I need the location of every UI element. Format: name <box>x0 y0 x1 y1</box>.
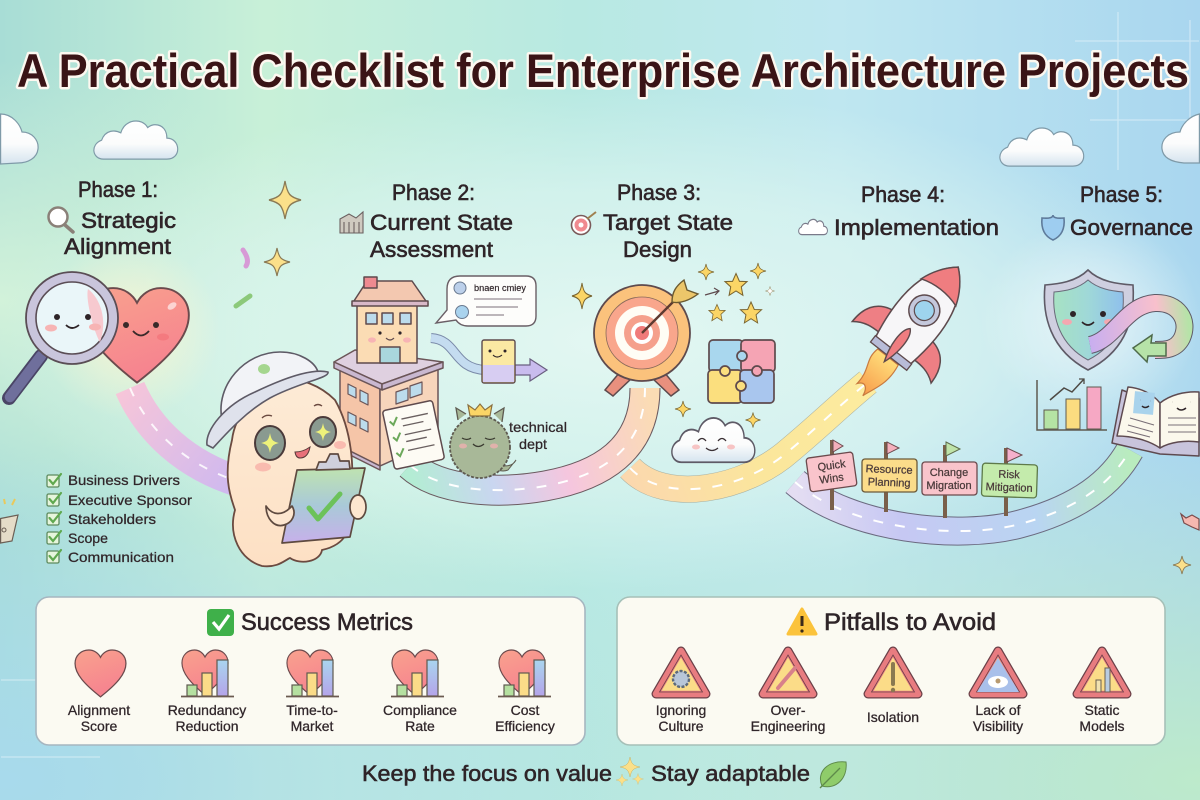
label: technical dept: dept <box>519 436 547 452</box>
clouds top <box>1 114 1199 166</box>
metric: redundancy reduction: Redundancy <box>168 702 246 718</box>
mascot hard hat <box>207 352 328 448</box>
icon: green check <box>207 609 234 636</box>
checklist paper <box>382 400 445 470</box>
phase 2 heading <box>340 180 513 262</box>
pitfall: over-engineering: Over- <box>770 702 806 718</box>
footer tagline <box>362 757 846 788</box>
label: technical dept <box>509 419 567 452</box>
illustration: lower building <box>334 350 443 470</box>
phase 4 heading: Implementation <box>834 215 999 240</box>
metric: redundancy reduction: Reduction <box>175 718 239 734</box>
speech bubble: bnaen cmiey <box>474 283 527 293</box>
phase 1 heading: Alignment <box>64 234 171 259</box>
phase 3 heading: Phase 3: <box>617 180 701 205</box>
metric: time-to-market <box>286 650 339 734</box>
stars around target <box>572 263 774 428</box>
flow arrow and card <box>431 338 547 383</box>
illustration: puzzle <box>708 340 775 403</box>
illustration: open book <box>1112 387 1199 456</box>
illustration: upper building <box>352 277 428 363</box>
phase 3 heading: Target State <box>603 210 733 235</box>
signpost: quick wins: Wins <box>819 471 845 487</box>
panel: success metrics <box>36 597 585 745</box>
metric: time-to-market: Time-to- <box>286 702 338 718</box>
sparkles and confetti near mascot <box>236 181 301 306</box>
pitfall: isolation: Isolation <box>867 709 919 725</box>
pitfall: static models <box>1077 651 1127 734</box>
checklist: strategic alignment <box>47 472 192 565</box>
chart: small bar chart <box>1037 379 1107 430</box>
metric: redundancy reduction <box>168 650 246 734</box>
illustration: shield <box>1044 270 1133 370</box>
speech bubble <box>436 276 536 326</box>
signpost: change migration: Migration <box>926 480 972 492</box>
metric: cost efficiency: Efficiency <box>495 718 555 734</box>
icon: magnifying glass <box>9 272 118 398</box>
panel: pitfalls to avoid <box>617 597 1165 745</box>
laptop fragment <box>1 499 18 543</box>
metric: alignment score <box>68 650 130 734</box>
icon: sparkles <box>616 757 644 786</box>
pitfall: lack of visibility <box>973 651 1023 734</box>
phase 4 heading: Phase 4: <box>861 182 945 207</box>
phase 3 heading <box>572 180 733 262</box>
icon: leaf <box>820 762 846 788</box>
pitfall: over-engineering <box>751 651 825 734</box>
illustration: smiling cloud <box>672 418 755 462</box>
panel: pitfalls to avoid: Pitfalls to Avoid <box>824 609 996 636</box>
pitfall: lack of visibility: Visibility <box>973 718 1023 734</box>
metric: alignment score: Score <box>81 718 117 734</box>
hand fragment and sparkle <box>1173 514 1199 574</box>
panel: success metrics: Success Metrics <box>241 609 413 636</box>
phase 5 heading: Governance <box>1070 215 1193 240</box>
metric: compliance rate: Rate <box>405 718 435 734</box>
icon: small shield <box>1042 215 1064 240</box>
pitfall: ignoring culture <box>656 651 706 734</box>
icon: smiling heart <box>85 288 189 383</box>
phase 2 heading: Current State <box>370 210 513 235</box>
metric: alignment score: Alignment <box>68 702 130 718</box>
mascot eyes <box>255 404 346 472</box>
signpost: resource planning <box>862 442 917 512</box>
footer tagline: Stay adaptable <box>651 761 810 786</box>
icon: small target <box>572 212 596 234</box>
signpost: risk mitigation: Mitigation <box>985 481 1033 495</box>
illustration: rocket <box>820 236 998 424</box>
signpost: change migration <box>922 442 977 518</box>
checklist: strategic alignment: Scope <box>68 530 108 546</box>
pitfall: lack of visibility: Lack of <box>975 702 1021 718</box>
mascot body <box>228 380 352 566</box>
metric: time-to-market: Market <box>291 718 333 734</box>
signpost: risk mitigation <box>981 448 1038 516</box>
mascot clipboard <box>266 454 366 543</box>
icon: warning <box>788 609 816 634</box>
signpost: change migration: Change <box>930 467 968 479</box>
icon: bank building <box>340 212 363 233</box>
monster: technical debt <box>450 404 516 478</box>
illustration: continuous improvement loop <box>1090 303 1184 362</box>
pitfall: ignoring culture: Culture <box>658 718 704 734</box>
metric: cost efficiency: Cost <box>511 702 539 718</box>
phase 2 heading: Phase 2: <box>392 180 475 205</box>
pitfall: static models: Static <box>1084 702 1120 718</box>
pitfall: static models: Models <box>1079 718 1125 734</box>
phase 5 heading <box>1042 182 1193 240</box>
footer tagline: Keep the focus on value <box>362 761 612 786</box>
pitfall: isolation <box>867 651 919 725</box>
phase 1 heading: Phase 1: <box>78 177 158 202</box>
label: technical dept: technical <box>509 419 567 435</box>
phase 2 heading: Assessment <box>370 237 493 262</box>
checklist: strategic alignment: Stakeholders <box>68 511 156 527</box>
illustration: target with arrow <box>594 280 719 396</box>
phase 3 heading: Design <box>623 237 692 262</box>
phase 1 heading <box>48 177 176 259</box>
pitfall: over-engineering: Engineering <box>751 718 825 734</box>
road: implementation to governance <box>795 450 1130 531</box>
signpost: quick wins: Quick <box>817 458 847 474</box>
signpost: resource planning: Resource <box>865 463 913 477</box>
road: target to rocket <box>630 382 868 489</box>
icon: small cloud <box>799 219 827 235</box>
checklist: strategic alignment: Executive Sponsor <box>68 492 192 508</box>
pitfall: ignoring culture: Ignoring <box>656 702 706 718</box>
signpost: risk mitigation: Risk <box>998 469 1020 481</box>
metric: compliance rate <box>383 650 457 734</box>
road: phase 1 to mascot <box>130 388 240 482</box>
checklist: strategic alignment: Communication <box>68 549 174 565</box>
signpost: quick wins <box>806 440 857 510</box>
checklist: strategic alignment: Business Drivers <box>68 472 180 488</box>
metric: compliance rate: Compliance <box>383 702 457 718</box>
phase 4 heading <box>799 182 999 240</box>
phase 1 heading: Strategic <box>81 208 176 233</box>
metric: cost efficiency <box>495 650 555 734</box>
road: phase 2 to target <box>410 388 645 490</box>
phase 5 heading: Phase 5: <box>1080 182 1163 207</box>
mascot with hard hat and clipboard <box>207 352 366 566</box>
icon: small magnifier <box>48 208 73 232</box>
signpost: resource planning: Planning <box>867 476 911 490</box>
